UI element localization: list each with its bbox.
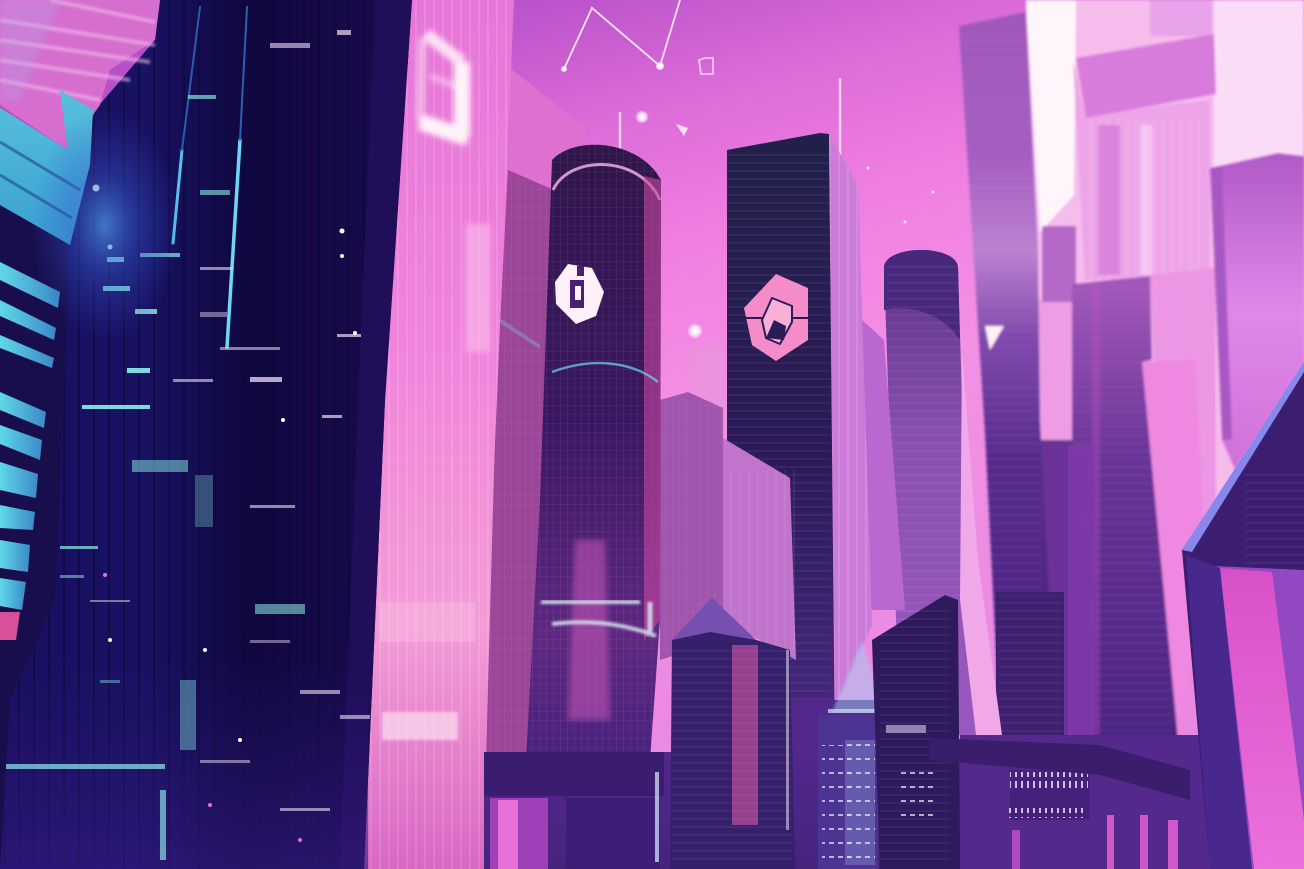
light band on tower — [541, 602, 656, 636]
striped pale tower — [1073, 60, 1210, 280]
cyan facade block — [0, 90, 93, 245]
left edge building with cyan bands — [0, 0, 180, 869]
huge pink building face — [364, 0, 514, 869]
cyan vertical neon strips — [173, 7, 247, 347]
neon cyan window bands — [0, 262, 60, 610]
tall violet tower — [959, 12, 1056, 735]
pale bright sky behind the cluster — [1026, 0, 1304, 520]
window lights — [0, 95, 305, 860]
glowing sky dots — [635, 110, 935, 339]
mid fill behind blocks — [1040, 440, 1100, 740]
dark block lower centre-right — [872, 595, 960, 869]
right foreground shard — [1182, 362, 1304, 869]
streaked pink facade — [0, 0, 160, 150]
huge dark skyscraper left — [0, 0, 412, 869]
pale pink strips — [1036, 300, 1076, 450]
lower right dark buildings — [960, 435, 1304, 869]
billboard letter on pink face — [420, 34, 468, 138]
gridded tower and cylindrical tower with C emblem — [486, 112, 661, 760]
central black skyscraper with emblem — [727, 78, 872, 760]
distant haze towers — [500, 68, 725, 605]
cylindrical tower — [862, 250, 1002, 735]
mid violet block — [1072, 276, 1178, 740]
blue glow — [30, 110, 180, 340]
constellation lines in sky — [562, 0, 713, 136]
icon: C emblem — [555, 264, 604, 324]
white light column — [1026, 0, 1076, 232]
sky bridge — [930, 738, 1190, 800]
right side skyscraper cluster — [959, 0, 1304, 760]
far right tower — [1210, 153, 1304, 470]
icon: shield emblem — [744, 274, 810, 361]
foreground tower with peak — [670, 598, 795, 869]
low foreground buildings — [484, 595, 1190, 869]
pink mid-tower and lilac block — [660, 392, 796, 660]
striped glass tower — [818, 715, 878, 869]
